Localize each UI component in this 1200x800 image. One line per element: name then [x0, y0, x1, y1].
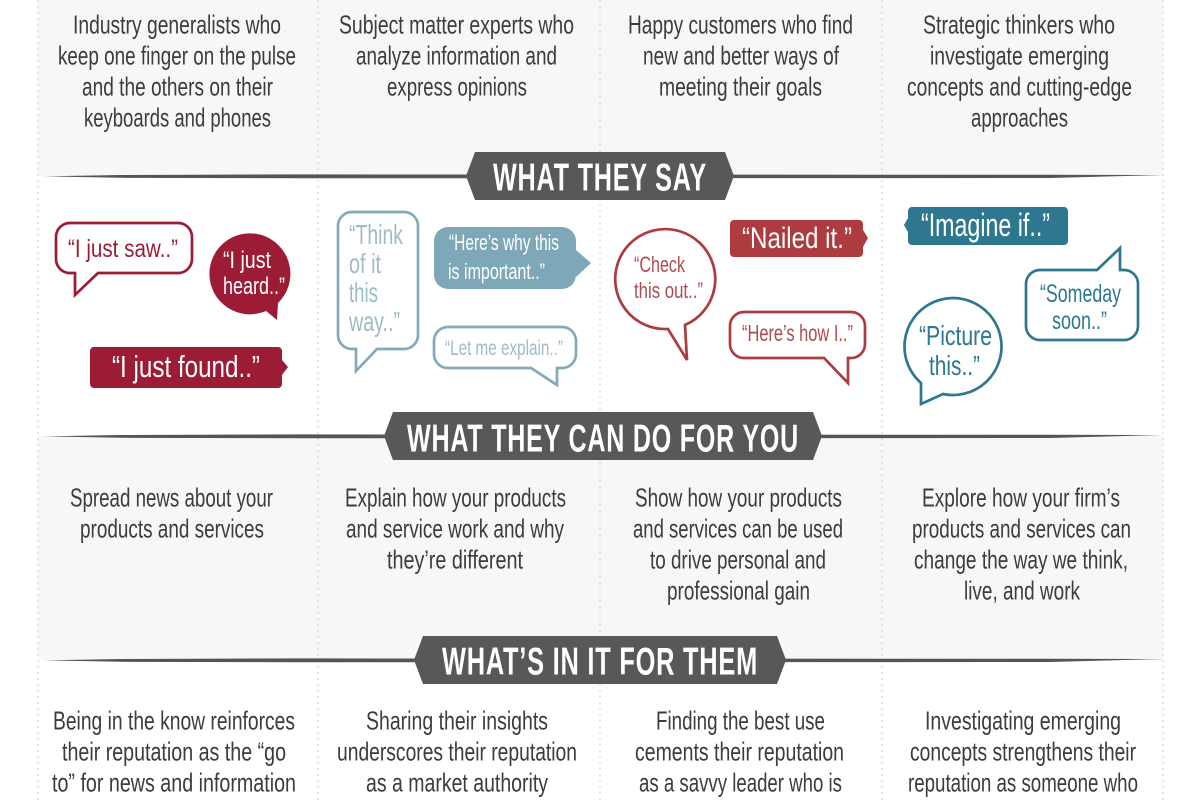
bubble: picture this: this..”	[929, 350, 980, 381]
text block: what they can do, column 4: change the way we think,	[914, 544, 1128, 574]
text block: who they are, column 1: keep one finger on the pulse	[58, 40, 296, 70]
text block: what's in it, column 1	[52, 706, 296, 798]
bubble: someday soon	[1026, 248, 1138, 340]
text block: what's in it, column 3: Finding the best use	[656, 706, 825, 736]
text block: what they can do, column 3: Show how your products	[635, 482, 842, 512]
bubble: let me explain: “Let me explain..”	[445, 337, 563, 360]
bubble: here's how I	[730, 312, 865, 383]
bubble: think of it this way	[338, 212, 418, 371]
text block: what they can do, column 3: and services can be used	[633, 514, 843, 544]
text block: what they can do, column 3: professional gain	[667, 576, 810, 606]
heading: what they can do for you	[44, 412, 1163, 460]
text block: who they are, column 3	[628, 10, 853, 102]
tag: imagine if: “Imagine if..”	[921, 207, 1050, 243]
text block: what they can do, column 4	[912, 482, 1131, 606]
text block: who they are, column 2	[339, 10, 574, 102]
bubble: picture this	[904, 298, 1001, 404]
heading: what's in it for them: WHAT’S IN IT FOR THEM	[442, 640, 758, 684]
text block: who they are, column 3: new and better ways of	[643, 40, 840, 70]
bubble: here's why this is important	[434, 227, 591, 289]
text block: what's in it, column 3: as a savvy leader who is	[639, 768, 842, 798]
tag: nailed it: “Nailed it.”	[742, 222, 852, 255]
text block: what's in it, column 4	[908, 706, 1138, 798]
text block: what's in it, column 1: their reputation as the “go	[62, 736, 286, 766]
text block: what's in it, column 3	[635, 706, 844, 798]
bubble: I just heard	[209, 233, 290, 320]
bubble: picture this: “Picture	[919, 320, 992, 351]
panel: thinker speech bubbles	[904, 207, 1138, 404]
text block: what they can do, column 3	[633, 482, 843, 606]
heading: what they say: WHAT THEY SAY	[493, 156, 707, 200]
text block: what they can do, column 4: live, and work	[964, 576, 1081, 606]
text block: what's in it, column 4: Investigating emerging	[925, 706, 1121, 736]
bubble: I just heard: heard..”	[223, 273, 285, 300]
text block: what they can do, column 2	[345, 482, 566, 574]
text block: who they are, column 2: express opinions	[387, 72, 527, 102]
text block: what they can do, column 3: to drive personal and	[650, 544, 826, 574]
text block: what's in it, column 2	[337, 706, 577, 798]
bubble: think of it this way: “Think	[349, 219, 404, 250]
bubble: here's how I: “Here’s how I..”	[742, 320, 853, 346]
bubble: someday soon: “Someday	[1040, 280, 1121, 308]
text block: who they are, column 2: analyze information and	[356, 40, 557, 70]
panel: customer speech bubbles	[615, 220, 868, 383]
bubble: check this out	[615, 229, 715, 360]
bubble: someday soon: soon..”	[1052, 307, 1107, 335]
text block: what's in it, column 1: to” for news and information	[52, 768, 296, 798]
text block: what they can do, column 4: Explore how your firm’s	[922, 482, 1120, 512]
text block: what they can do, column 2: Explain how your products	[345, 482, 566, 512]
heading: what they say	[44, 152, 1163, 200]
bubble: here's why this is important: is important..”	[448, 259, 545, 284]
text block: who they are, column 4: approaches	[971, 102, 1068, 132]
text block: what they can do, column 1: Spread news about your	[70, 482, 273, 512]
text block: what's in it, column 3: cements their reputation	[635, 736, 844, 766]
panel: generalist speech bubbles	[56, 223, 290, 388]
bubble: here's why this is important: “Here’s why this	[449, 230, 559, 255]
text block: who they are, column 1: and the others on their	[82, 72, 273, 102]
text block: who they are, column 1: keyboards and phones	[84, 102, 271, 132]
text block: what they can do, column 1	[70, 482, 273, 544]
tag: I just found: “I just found..”	[112, 349, 260, 384]
text block: who they are, column 3: meeting their goals	[659, 72, 822, 102]
bubble: I just saw: “I just saw..”	[68, 235, 178, 263]
text block: who they are, column 4: Strategic thinkers who	[923, 10, 1115, 40]
panel: expert speech bubbles	[338, 212, 591, 385]
bubble: let me explain	[434, 327, 576, 385]
bubble: think of it this way: this	[349, 277, 378, 308]
bubble: think of it this way: of it	[349, 248, 381, 279]
bubble: I just heard: “I just	[223, 247, 271, 274]
text block: who they are, column 3: Happy customers who find	[628, 10, 853, 40]
text block: who they are, column 4	[907, 10, 1132, 132]
text block: what's in it, column 2: Sharing their insights	[366, 706, 548, 736]
text block: what's in it, column 2: underscores their reputation	[337, 736, 577, 766]
text block: who they are, column 1: Industry generalists who	[73, 10, 281, 40]
text block: what they can do, column 2: and service work and why	[346, 514, 564, 544]
heading: what they can do for you: WHAT THEY CAN DO FOR YOU	[407, 418, 799, 460]
text block: what's in it, column 2: as a market authority	[366, 768, 548, 798]
text block: what's in it, column 1: Being in the know reinforces	[53, 706, 295, 736]
text block: what they can do, column 2: they’re different	[387, 544, 524, 574]
bubble: check this out: “Check	[634, 252, 686, 277]
bubble: check this out: this out..”	[634, 278, 703, 303]
bubble: I just saw	[56, 223, 192, 295]
bubble: think of it this way: way..”	[348, 306, 400, 337]
text block: who they are, column 4: investigate emerging	[930, 40, 1109, 70]
text block: who they are, column 2: Subject matter experts who	[339, 10, 574, 40]
text block: what they can do, column 1: products and services	[80, 514, 264, 544]
text block: who they are, column 1	[58, 10, 296, 132]
heading: what's in it for them	[44, 636, 1163, 684]
